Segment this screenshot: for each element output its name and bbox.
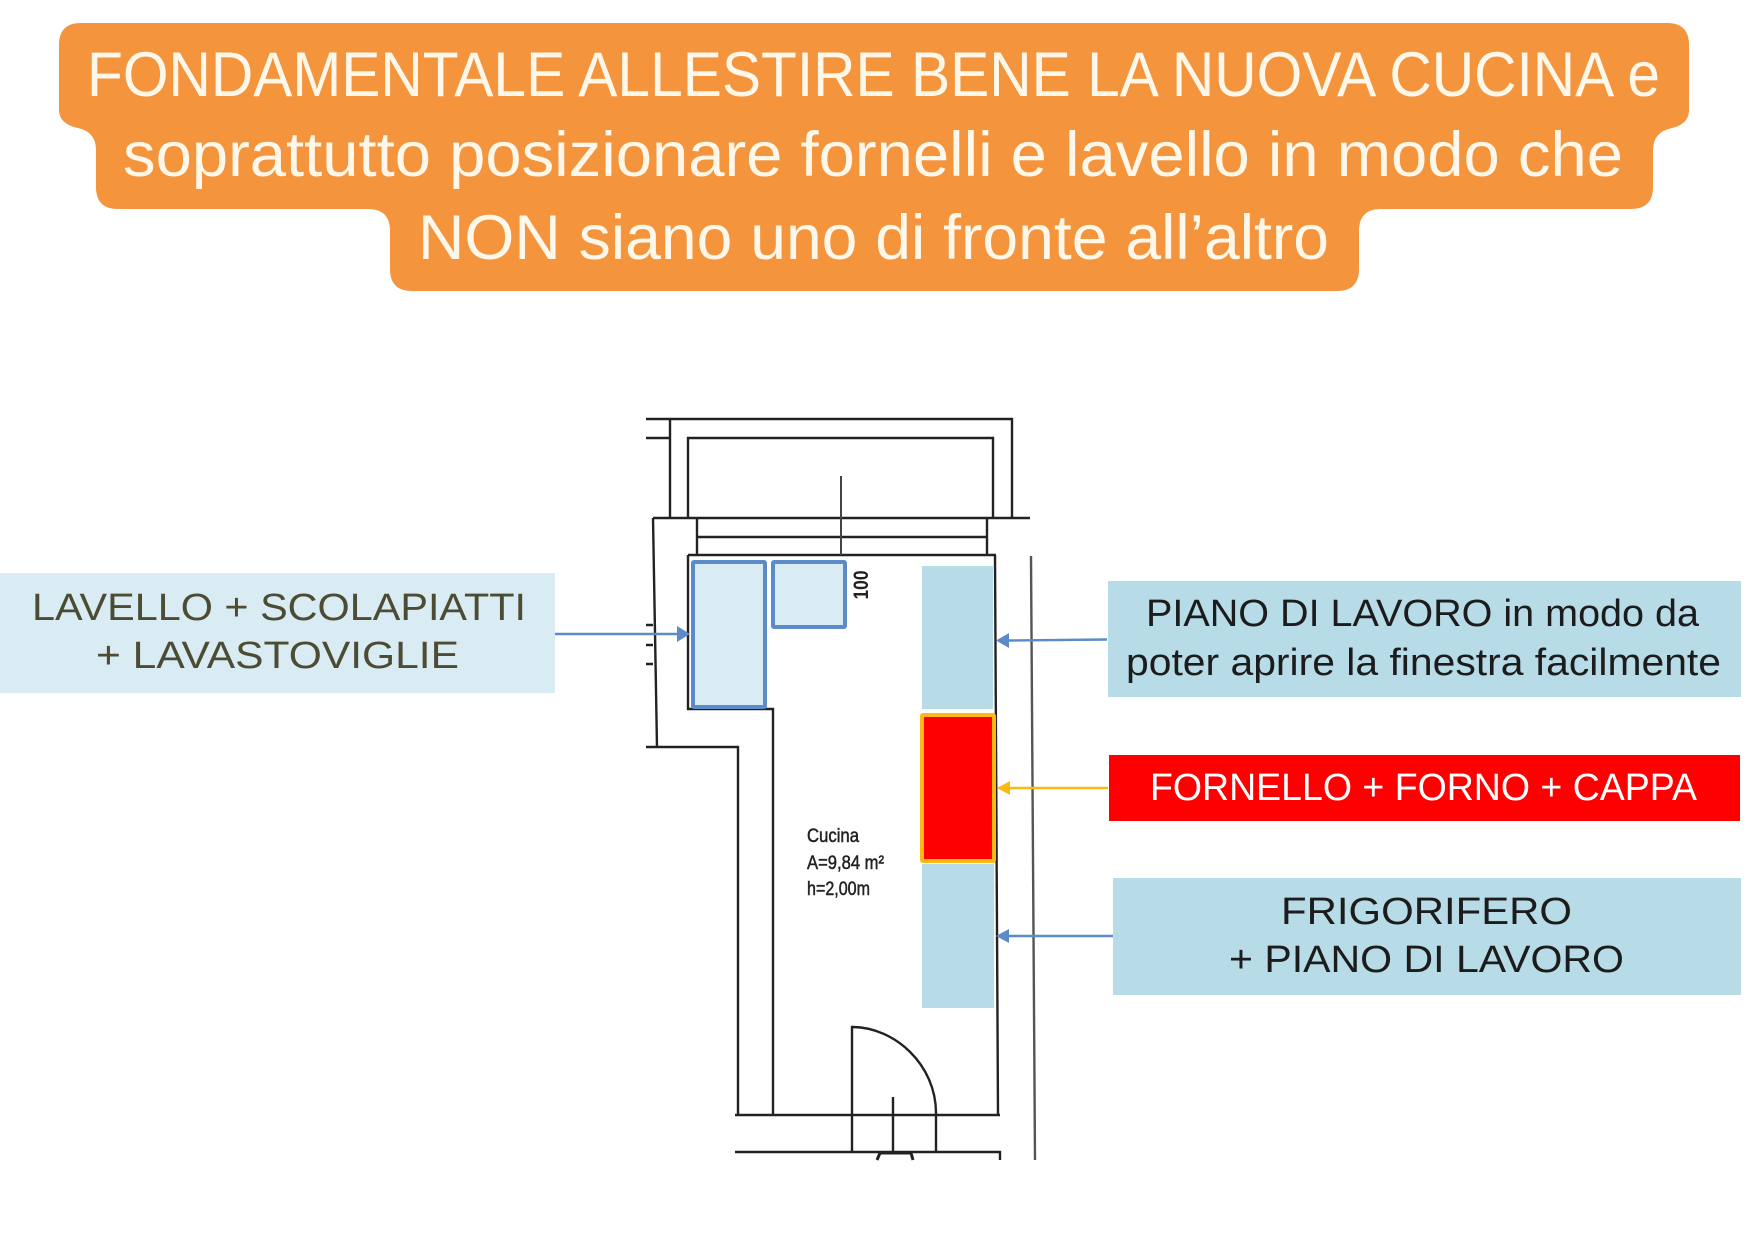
drainer unit — [773, 562, 845, 627]
callout line 1: PIANO DI LAVORO in modo da — [1146, 593, 1700, 635]
callout background — [1108, 581, 1741, 697]
callout: sink, drainer, dishwasher — [0, 573, 555, 693]
fridge and worktop zone — [922, 864, 994, 1008]
callout: fridge and worktop — [1113, 878, 1741, 995]
sink unit — [693, 562, 765, 707]
banner background — [59, 23, 1689, 291]
kitchen floor plan — [646, 419, 1035, 1160]
arrow: hob label to hob — [997, 781, 1108, 795]
room area: A=9,84 m² — [807, 853, 884, 874]
callout: hob, oven, hood — [1109, 755, 1740, 821]
callout line 2: + PIANO DI LAVORO — [1229, 939, 1624, 981]
hob zone — [922, 715, 994, 861]
arrow: worktop label to worktop — [996, 633, 1107, 648]
dimension 100: 100 — [850, 570, 873, 600]
heading line 1: FONDAMENTALE ALLESTIRE BENE LA NUOVA CUCINA e — [87, 40, 1660, 110]
callout line 2: poter aprire la finestra facilmente — [1126, 642, 1721, 684]
heading line 2: soprattutto posizionare fornelli e lavello in modo che — [123, 120, 1623, 190]
title banner — [59, 23, 1689, 291]
room name: Cucina — [807, 826, 859, 847]
arrow: fridge label to fridge — [996, 929, 1113, 943]
callout line 1: LAVELLO + SCOLAPIATTI — [32, 587, 526, 629]
plan wall lines — [646, 419, 1035, 1160]
plan label fragment cut at the bottom — [877, 1153, 913, 1160]
arrow: sink label to sink — [555, 626, 690, 642]
callout line 2: + LAVASTOVIGLIE — [96, 635, 459, 677]
callout background — [1113, 878, 1741, 995]
worktop zone upper — [922, 566, 993, 709]
callout background — [0, 573, 555, 693]
callout background — [1109, 755, 1740, 821]
callout: worktop — [1108, 581, 1741, 697]
callout text: FORNELLO + FORNO + CAPPA — [1150, 767, 1698, 809]
room label — [807, 826, 884, 900]
heading line 3: NON siano uno di fronte all’altro — [418, 203, 1329, 273]
callout line 1: FRIGORIFERO — [1281, 891, 1572, 933]
room height: h=2,00m — [807, 879, 870, 900]
